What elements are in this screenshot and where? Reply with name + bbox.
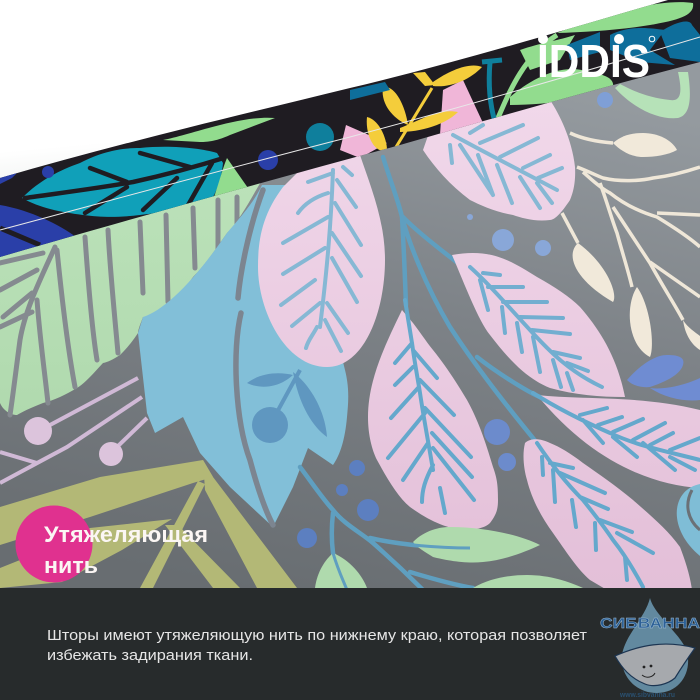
hem band <box>0 0 700 260</box>
teal stem <box>482 60 502 122</box>
pink leaf far right <box>533 393 700 488</box>
pink leaf bottom right <box>524 439 692 590</box>
blue dots on hem <box>258 150 278 170</box>
caption text: избежать задирания ткани. <box>47 648 253 664</box>
teal flowers <box>350 21 700 100</box>
periwinkle leaves <box>627 355 700 400</box>
gray vein on blue leaf <box>236 190 273 525</box>
yellow flower <box>367 65 482 152</box>
teal leaf at right edge <box>677 484 700 556</box>
watermark logo: www.sibvanna.ru <box>619 692 675 699</box>
stitch line <box>0 37 700 230</box>
olive leaf <box>0 460 297 588</box>
lilac twigs with berries <box>0 378 147 483</box>
caption text <box>47 628 587 664</box>
stems over green leaves <box>332 544 470 588</box>
dark caption panel <box>0 588 700 700</box>
caption text: Шторы имеют утяжеляющую нить по нижнему краю, которая позволяет <box>47 628 587 644</box>
pale green large leaf <box>0 180 262 415</box>
pink leaf one <box>258 150 385 367</box>
heading: нить <box>44 553 98 578</box>
cream buds and branches <box>562 133 700 357</box>
blue dots <box>297 92 613 548</box>
iddis logo: IDDIS <box>537 35 650 87</box>
pale green upper right leaf <box>615 72 690 118</box>
white backdrop <box>0 0 700 260</box>
light blue large leaf <box>138 185 348 527</box>
heading <box>44 522 208 578</box>
watermark logo <box>600 598 700 699</box>
green leaf patches <box>163 2 693 200</box>
blue edge patch <box>0 173 17 184</box>
pink circle badge <box>16 506 92 582</box>
pale green bottom leaves <box>315 527 583 588</box>
printed curtain fabric <box>0 62 700 588</box>
pink leaf right <box>452 253 625 397</box>
blue stems <box>300 157 540 590</box>
pink patches <box>340 80 483 158</box>
pink leaf lower centre <box>368 300 498 530</box>
watermark logo: СИБВАННА <box>600 615 700 632</box>
heading: Утяжеляющая <box>44 522 208 547</box>
pink leaf top <box>423 100 575 221</box>
blue leaf <box>0 205 76 258</box>
blue sprig on light leaf <box>247 370 327 443</box>
teal leaf <box>22 147 227 217</box>
blue leaf rib <box>0 228 40 245</box>
